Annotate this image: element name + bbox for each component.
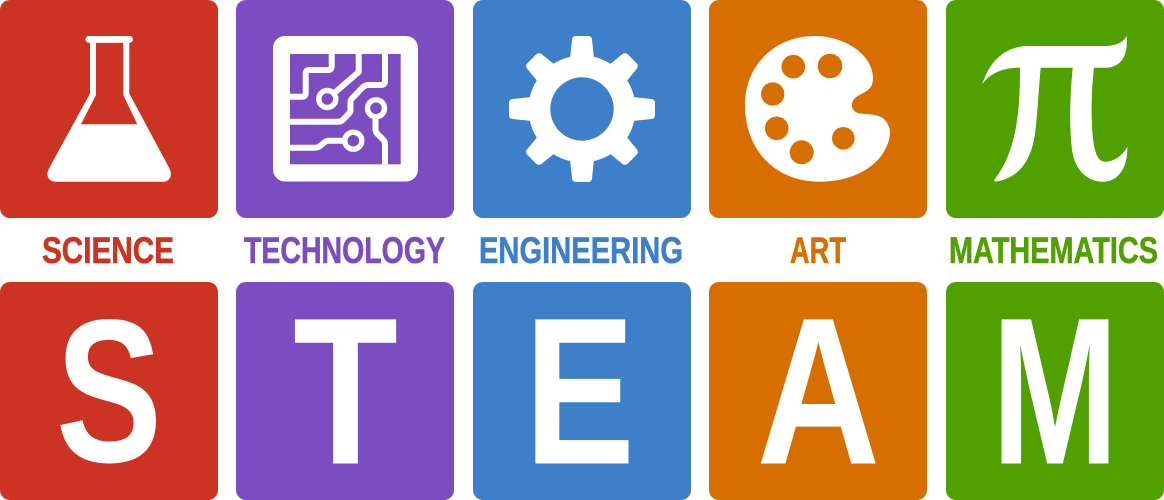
icon: circuit board: [273, 36, 418, 182]
panel: art icon tile: [709, 0, 927, 218]
icon: flask: [47, 36, 171, 182]
panel: science icon tile: [0, 0, 218, 218]
panel: letter M tile: [946, 282, 1164, 500]
panel: letter S tile: [0, 282, 218, 500]
column: technology: [236, 0, 454, 500]
panel: technology icon tile: [236, 0, 454, 218]
icon: paint palette: [745, 36, 890, 182]
panel: mathematics icon tile: [946, 0, 1164, 218]
panel: letter T tile: [236, 282, 454, 500]
label: engineering: ENGINEERING: [479, 229, 683, 271]
column: art: [709, 0, 927, 500]
icon: pi symbol: [982, 36, 1127, 182]
letter S: S: [56, 278, 162, 500]
label: technology: TECHNOLOGY: [244, 229, 445, 271]
column: science: [0, 0, 218, 500]
column: mathematics: [946, 0, 1164, 500]
icon: gear: [509, 36, 655, 182]
panel: letter A tile: [709, 282, 927, 500]
label: art: ART: [790, 229, 846, 271]
column: engineering: [473, 0, 691, 500]
panel: engineering icon tile: [473, 0, 691, 218]
panel: letter E tile: [473, 282, 691, 500]
label: science: SCIENCE: [42, 229, 174, 271]
